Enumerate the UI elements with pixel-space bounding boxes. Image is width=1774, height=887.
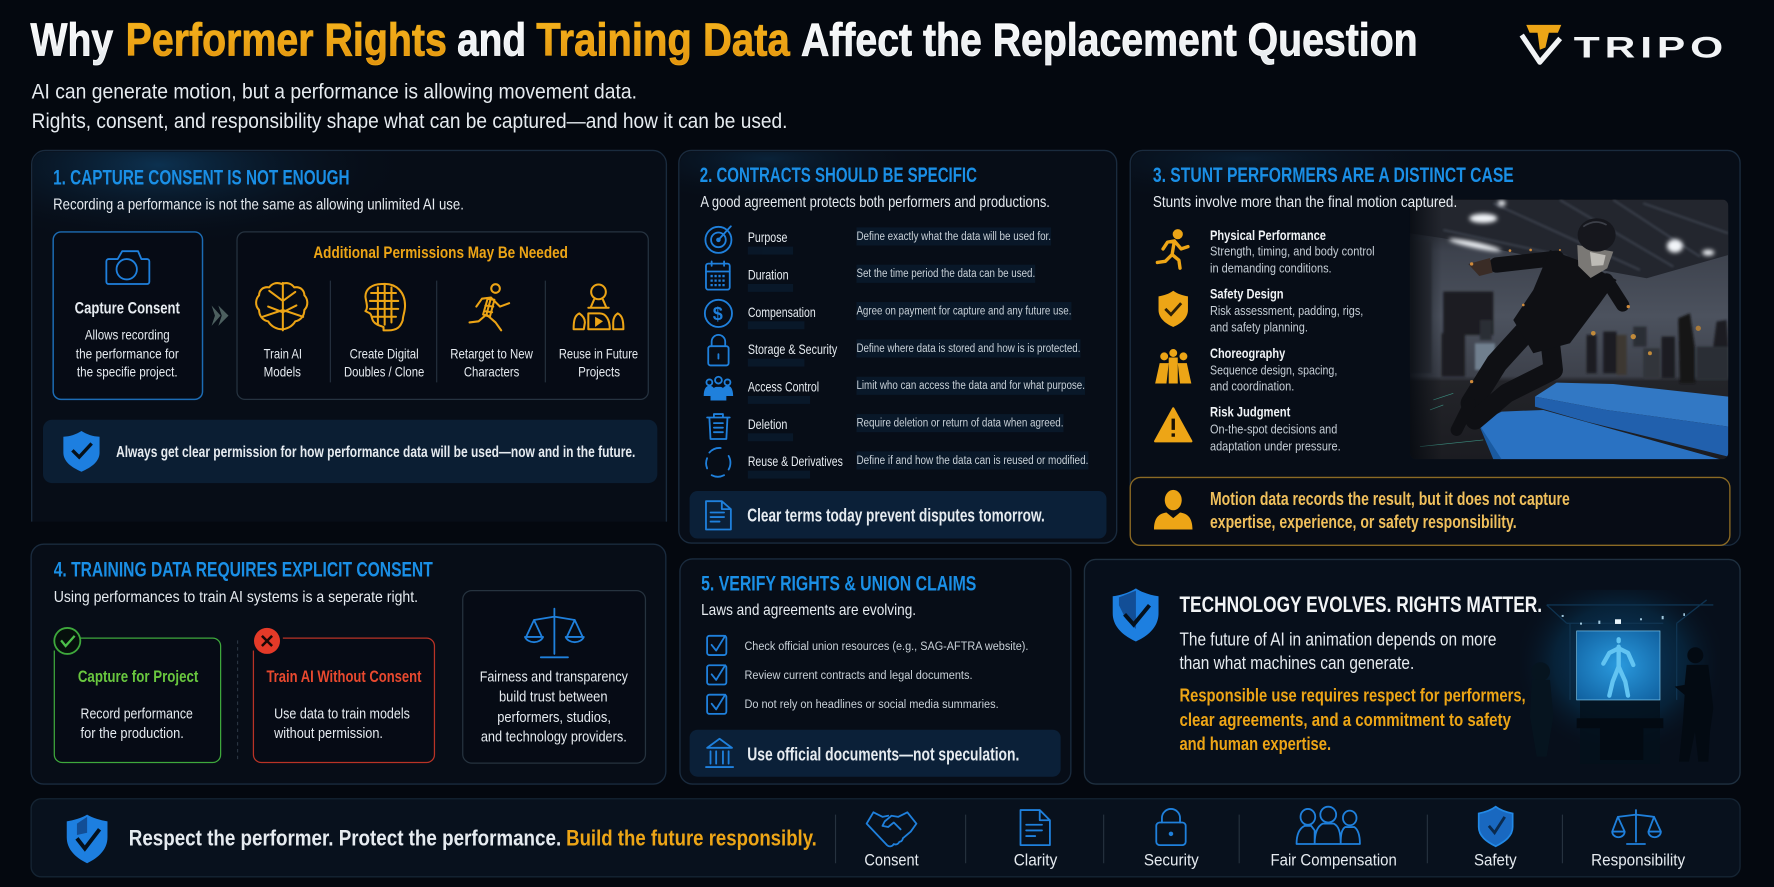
row: compensation: Agree on payment for capture and any future use.: [856, 304, 1071, 318]
icon: warning: [1155, 408, 1191, 441]
value: safety: [1474, 807, 1517, 870]
checklist item: [707, 695, 999, 714]
labels: Train AI: [264, 346, 302, 362]
row: access control: [704, 377, 1085, 401]
value: security: Security: [1144, 851, 1199, 870]
card body: without permission.: [273, 726, 383, 742]
heading: TECHNOLOGY EVOLVES. RIGHTS MATTER.: [1179, 592, 1542, 617]
item: safety design: Risk assessment, padding, rigs,: [1210, 303, 1363, 318]
panel 5: verify rights: [680, 559, 1071, 784]
row: storage and security: Define where data is stored and how is is protected.: [856, 341, 1080, 355]
icon: runner: [1157, 231, 1188, 268]
item: risk judgment: adaptation under pressure.: [1210, 438, 1341, 453]
checklist item: [707, 665, 973, 684]
title: and: [457, 13, 526, 65]
subtitle: AI can generate motion, but a performance is allowing movement data.: [32, 79, 637, 103]
card body: the performance for: [76, 346, 179, 362]
card title: Capture Consent: [75, 298, 180, 317]
row: duration: Duration: [748, 267, 789, 282]
row: compensation: $: [713, 304, 723, 324]
item: risk judgment: Risk Judgment: [1210, 403, 1291, 419]
heading: 4. TRAINING DATA REQUIRES EXPLICIT CONSENT: [54, 558, 433, 581]
title: Affect the Replacement Question: [801, 13, 1418, 65]
performer silhouette: [1457, 218, 1623, 430]
gold statement: [1179, 684, 1526, 754]
card title: Capture for Project: [78, 667, 199, 686]
value: responsibility: [1591, 810, 1686, 870]
callout text: expertise, experience, or safety responsibility.: [1210, 512, 1517, 532]
text block: The future of AI in animation depends on more: [1179, 628, 1496, 649]
value: safety: Safety: [1474, 851, 1517, 870]
callout: [43, 420, 657, 483]
value: fair compensation: Fair Compensation: [1271, 851, 1397, 870]
checklist item: Do not rely on headlines or social media summaries.: [744, 697, 999, 711]
icon: running figure: [470, 284, 509, 330]
card title: Train AI Without Consent: [266, 667, 422, 686]
value: consent: [864, 812, 919, 870]
card: fairness: [463, 591, 645, 763]
value: fair compensation: [1271, 807, 1397, 870]
panel 4: training data: [31, 544, 666, 784]
callout text: Always get clear permission for how performance data will be used—now and in the future.: [116, 444, 635, 461]
card heading: Additional Permissions May Be Needed: [313, 243, 568, 262]
item: choreography: and coordination.: [1210, 378, 1294, 393]
icon: performer: [1154, 490, 1192, 529]
row: storage and security: [708, 335, 1080, 365]
card body: Fairness and transparency: [480, 670, 628, 686]
callout text: Motion data records the result, but it does not capture: [1210, 489, 1570, 509]
callout: [1130, 477, 1730, 545]
card: capture for project: [54, 628, 221, 763]
icon: cross badge: [254, 628, 280, 654]
row: access control: Limit who can access the data and for what purpose.: [856, 378, 1085, 392]
item: safety design: [1159, 286, 1363, 334]
checklist item: [707, 636, 1028, 655]
icon: group: [1155, 349, 1191, 384]
item: risk judgment: On-the-spot decisions and: [1210, 421, 1337, 436]
labels: Projects: [578, 364, 620, 380]
labels: Characters: [464, 364, 519, 380]
panel 3: stunt performers: [1130, 150, 1740, 545]
row: deletion: Deletion: [748, 417, 787, 432]
arrow: [212, 305, 229, 326]
item: choreography: Choreography: [1210, 345, 1285, 361]
logo: Tripo: [1522, 25, 1728, 65]
logo: Tripo: TRIPO: [1574, 32, 1728, 65]
icon: institution: [706, 739, 733, 767]
value: consent: Consent: [864, 851, 919, 870]
heading: 3. STUNT PERFORMERS ARE A DISTINCT CASE: [1153, 164, 1514, 187]
card body: for the production.: [81, 726, 184, 742]
intro text: Laws and agreements are evolving.: [701, 602, 916, 619]
callout text: Clear terms today prevent disputes tomorrow.: [747, 506, 1045, 526]
item: physical performance: Strength, timing, and body control: [1210, 244, 1375, 259]
item: physical performance: [1157, 227, 1375, 276]
icon: check badge: [54, 628, 80, 654]
gold statement: Responsible use requires respect for performers,: [1179, 684, 1526, 705]
icon: scales: [525, 609, 584, 657]
panel 6: technology evolves: [1084, 559, 1740, 784]
value: security: [1144, 809, 1199, 870]
icon: document: [706, 501, 731, 529]
photo: stunt performer: [1410, 199, 1728, 459]
row: deletion: [707, 414, 1063, 439]
labels: Create Digital: [350, 346, 419, 362]
gold statement: clear agreements, and a commitment to safety: [1179, 709, 1511, 730]
gold statement: and human expertise.: [1179, 733, 1331, 754]
checklist item: Check official union resources (e.g., SAG-AFTRA website).: [744, 639, 1028, 653]
labels: [264, 346, 638, 380]
heading: 1. CAPTURE CONSENT IS NOT ENOUGH: [53, 166, 350, 189]
row: purpose: [705, 226, 1051, 253]
heading: 5. VERIFY RIGHTS & UNION CLAIMS: [701, 573, 976, 596]
callout: [690, 491, 1106, 539]
item: choreography: [1155, 345, 1337, 393]
row: reuse and derivatives: Reuse & Derivatives: [748, 454, 843, 469]
text block: than what machines can generate.: [1179, 652, 1414, 673]
card body: performers, studios,: [497, 710, 611, 726]
subtitle: Rights, consent, and responsibility shape what can be captured—and how it can be used.: [32, 109, 787, 133]
icon: reuse / future projects: [574, 285, 623, 329]
card: capture consent: [53, 232, 203, 399]
card body: Record performance: [81, 706, 193, 722]
card body: [480, 670, 628, 746]
intro text: Recording a performance is not the same as allowing unlimited AI use.: [53, 196, 464, 213]
checklist item: Review current contracts and legal documents.: [744, 668, 973, 682]
item: risk judgment: [1155, 403, 1341, 453]
row: purpose: Define exactly what the data will be used for.: [856, 229, 1051, 243]
item: choreography: Sequence design, spacing,: [1210, 362, 1337, 377]
row: compensation: Compensation: [748, 305, 816, 320]
heading: 2. CONTRACTS SHOULD BE SPECIFIC: [700, 164, 977, 187]
card body: Use data to train models: [274, 706, 410, 722]
row: purpose: Purpose: [748, 230, 787, 245]
title: Performer Rights: [126, 13, 447, 65]
labels: Doubles / Clone: [344, 364, 424, 380]
callout text: Use official documents—not speculation.: [747, 744, 1019, 764]
labels: Reuse in Future: [559, 346, 638, 362]
labels: Models: [264, 364, 301, 380]
card body: and technology providers.: [481, 730, 627, 746]
intro text: Stunts involve more than the final motion captured.: [1153, 194, 1457, 211]
row: reuse and derivatives: [706, 448, 1088, 477]
tagline: Build the future responsibly.: [566, 826, 817, 851]
item: safety design: Safety Design: [1210, 286, 1284, 302]
card: train without consent: [253, 628, 434, 763]
card body: the specifie project.: [77, 364, 178, 380]
footer bar: [31, 799, 1740, 877]
icon: shield: [1113, 588, 1159, 641]
row: duration: Set the time period the data can be used.: [856, 266, 1035, 280]
intro text: A good agreement protects both performers and productions.: [700, 194, 1050, 211]
intro text: Using performances to train AI systems is a seperate right.: [54, 589, 418, 606]
icon: shield: [1159, 291, 1188, 327]
item: physical performance: Physical Performance: [1210, 227, 1326, 243]
title: Training Data: [536, 13, 791, 65]
icon: shield: [67, 815, 107, 863]
card body: [81, 706, 193, 742]
title: [31, 13, 1418, 65]
glow strips: [748, 227, 1088, 479]
callout text: [1210, 489, 1570, 532]
card body: [273, 706, 410, 742]
item: physical performance: in demanding conditions.: [1210, 261, 1332, 276]
row: duration: [706, 261, 1035, 290]
row: compensation: [705, 300, 1071, 327]
panel 1: capture consent: [32, 150, 666, 522]
subtitle: [32, 79, 787, 133]
icon: brain: [256, 283, 307, 330]
row: deletion: Require deletion or return of data when agreed.: [856, 416, 1063, 430]
text block: [1179, 628, 1496, 673]
row: reuse and derivatives: Define if and how the data can is reused or modified.: [856, 453, 1088, 467]
callout: [690, 730, 1061, 777]
card body: build trust between: [499, 689, 608, 705]
image: motion capture stage: [1520, 590, 1720, 764]
row: storage and security: Storage & Security: [748, 342, 837, 357]
value: responsibility: Responsibility: [1591, 851, 1686, 870]
icon: camera: [106, 251, 149, 284]
icon: shield: [63, 431, 100, 472]
card body: Allows recording: [85, 326, 170, 342]
card body: [76, 326, 179, 380]
card: additional permissions: [237, 232, 648, 399]
panel 2: contracts: [679, 150, 1117, 543]
icon: digital double head: [365, 284, 405, 330]
value: clarity: [1014, 810, 1058, 870]
title: Why: [31, 13, 113, 65]
item: safety design: and safety planning.: [1210, 319, 1308, 334]
tagline: Respect the performer. Protect the performance.: [129, 826, 561, 851]
row: access control: Access Control: [748, 379, 819, 394]
labels: Retarget to New: [450, 346, 534, 362]
value: clarity: Clarity: [1014, 851, 1058, 870]
